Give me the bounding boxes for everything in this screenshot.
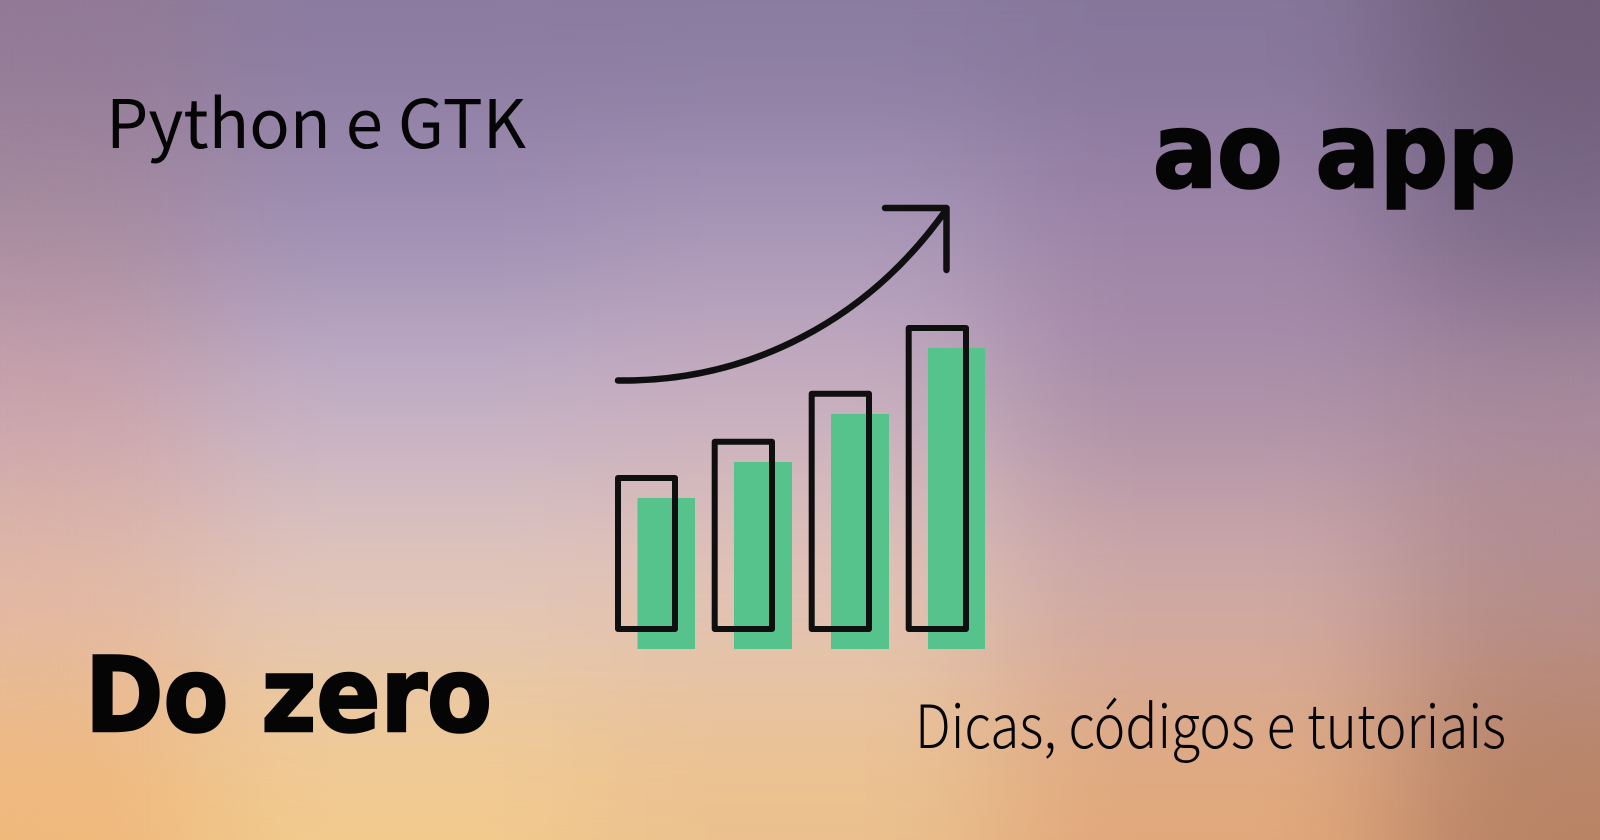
outlined bars: [618, 328, 966, 629]
heading: Do zero: Do zero: [85, 636, 492, 756]
chart: growing bars with arrow: [618, 208, 985, 649]
text: Dicas, códigos e tutoriais: Dicas, códigos e tutoriais: [915, 679, 1506, 766]
text: Python e GTK: Python e GTK: [106, 71, 526, 168]
green bars: [638, 348, 985, 649]
heading: ao app: ao app: [1153, 92, 1516, 212]
arrow: rising curve: [618, 208, 946, 381]
